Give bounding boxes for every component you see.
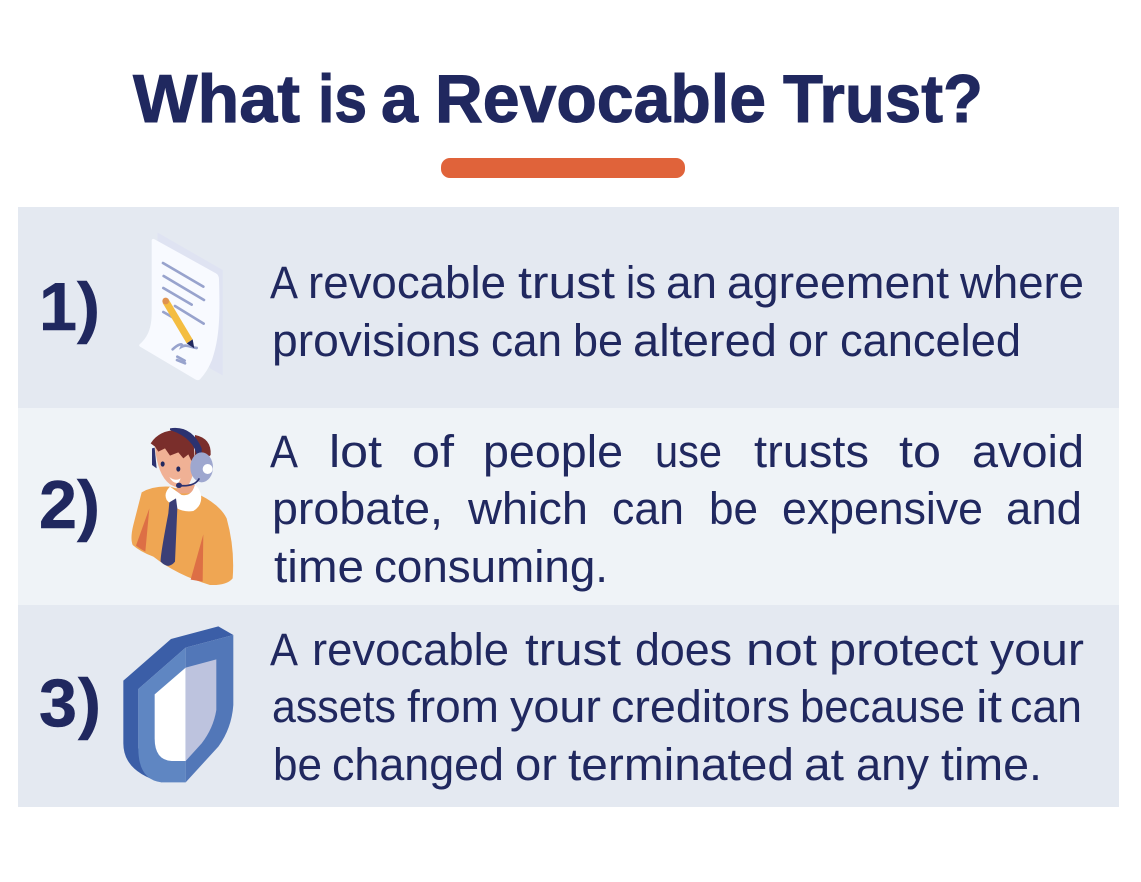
number 2: ) xyxy=(77,467,100,543)
text 3: from xyxy=(407,681,499,732)
title: a xyxy=(381,61,419,137)
panel: item 3 xyxy=(18,605,1119,807)
text 2: expensive xyxy=(782,483,983,534)
text 3: your xyxy=(990,624,1084,675)
text 2: can xyxy=(612,483,684,534)
text 1: is xyxy=(626,257,656,308)
text 2: and xyxy=(1006,483,1082,534)
number 2: 2 xyxy=(39,467,77,543)
text 3: assets xyxy=(272,681,396,732)
text 3: not xyxy=(746,624,818,675)
title: Trust? xyxy=(783,61,983,137)
number 3: 3 xyxy=(39,665,77,741)
text 1 xyxy=(270,257,1084,366)
text 2: consuming. xyxy=(374,541,608,592)
title: What xyxy=(133,61,300,137)
text 1: canceled xyxy=(840,315,1021,366)
text 1: revocable xyxy=(308,257,506,308)
text 2: avoid xyxy=(972,426,1084,477)
text 3 xyxy=(270,624,1084,790)
text 3: changed xyxy=(332,739,504,790)
number 1 xyxy=(39,269,100,345)
text 1: trust xyxy=(518,257,616,308)
text 1: can xyxy=(491,315,562,366)
text 2: A xyxy=(270,426,298,477)
text 2 xyxy=(270,426,1084,592)
text 3: or xyxy=(515,739,557,790)
icon: person with headset xyxy=(131,428,233,585)
number 3 xyxy=(39,665,101,741)
text 3: trust xyxy=(525,624,622,675)
text 1: or xyxy=(788,315,828,366)
text 1: be xyxy=(573,315,623,366)
number 2 xyxy=(39,467,100,543)
text 3: it xyxy=(976,681,1003,732)
text 3: at xyxy=(804,739,845,790)
text 3: any xyxy=(856,739,929,790)
text 3: revocable xyxy=(312,624,509,675)
text 1: agreement xyxy=(727,257,950,308)
text 3: can xyxy=(1010,681,1082,732)
text 3: terminated xyxy=(568,739,794,790)
text 3: A xyxy=(270,624,298,675)
number 1: ) xyxy=(77,269,100,345)
text 3: because xyxy=(800,681,965,732)
text 2: to xyxy=(899,426,941,477)
text 3: time. xyxy=(941,739,1042,790)
text 1: A xyxy=(270,257,298,308)
text 1: provisions xyxy=(272,315,480,366)
text 1: altered xyxy=(633,315,777,366)
text 2: be xyxy=(709,483,758,534)
text 2: of xyxy=(412,426,455,477)
text 3: does xyxy=(635,624,732,675)
panel: item 1 xyxy=(18,207,1119,408)
icon: shield xyxy=(123,626,233,782)
text 3: protect xyxy=(829,624,979,675)
number 1: 1 xyxy=(39,269,77,345)
panel: item 2 xyxy=(18,408,1119,605)
text 2: which xyxy=(467,483,588,534)
icon: document with pencil xyxy=(139,233,223,380)
text 2: probate, xyxy=(272,483,443,534)
text 3: be xyxy=(273,739,322,790)
title underline xyxy=(441,158,685,178)
text 3: your xyxy=(510,681,601,732)
title xyxy=(133,61,983,137)
text 2: use xyxy=(655,426,722,477)
text 1: an xyxy=(666,257,717,308)
text 2: trusts xyxy=(754,426,869,477)
text 2: people xyxy=(483,426,623,477)
text 2: time xyxy=(274,541,364,592)
number 3: ) xyxy=(78,665,101,741)
text 1: where xyxy=(959,257,1084,308)
text 3: creditors xyxy=(611,681,790,732)
text 2: lot xyxy=(329,426,383,477)
title: Revocable xyxy=(435,61,766,137)
title: is xyxy=(318,61,367,137)
